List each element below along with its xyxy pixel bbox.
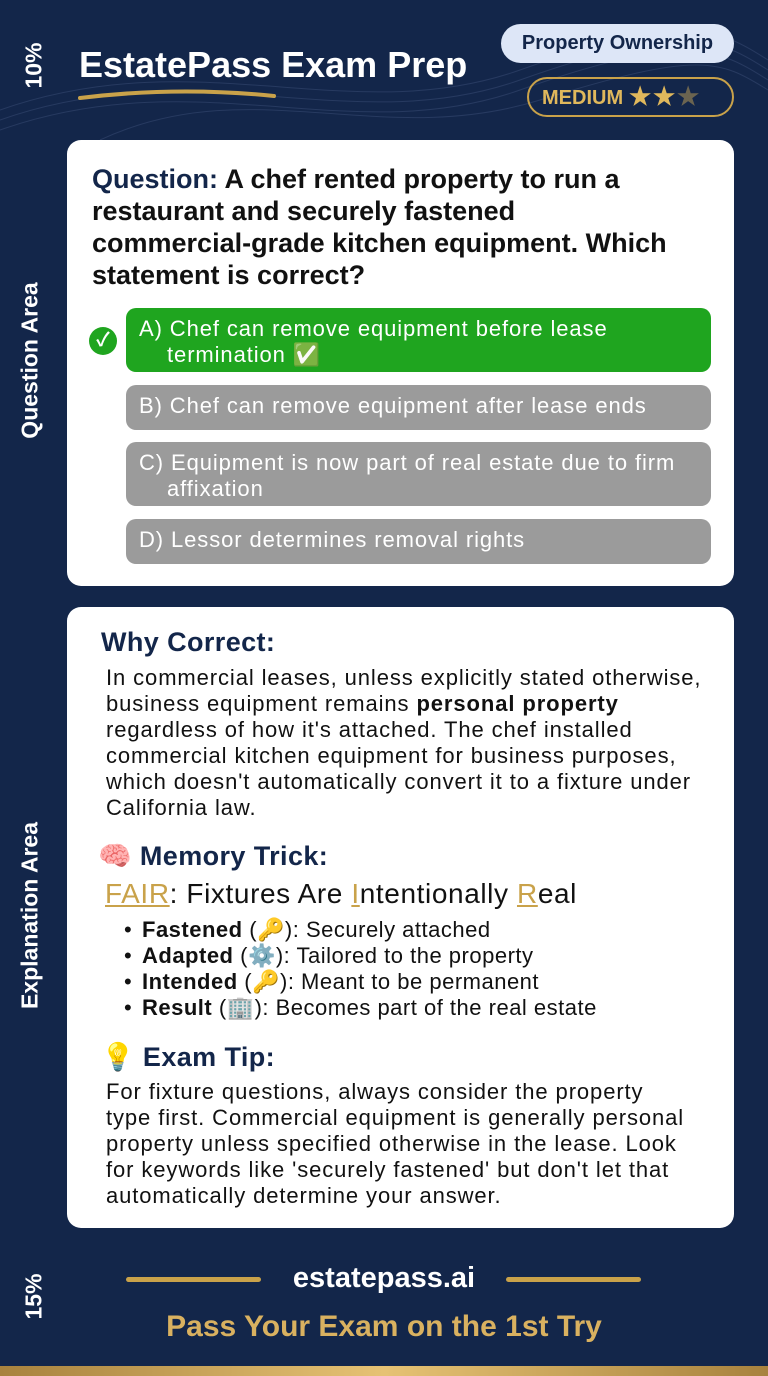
why correct text: commercial kitchen equipment for business purposes, (106, 743, 676, 768)
check icon: ✓ (96, 330, 110, 351)
question text: restaurant and securely fastened (92, 196, 515, 226)
badge: difficulty (527, 77, 734, 117)
option D: D) Lessor determines removal rights (139, 527, 525, 552)
option A correct: termination ✅ (167, 342, 321, 367)
exam tip text: type first. Commercial equipment is generally personal (106, 1105, 684, 1130)
why correct text: California law. (106, 795, 256, 820)
question text (92, 164, 667, 290)
exam tip text: automatically determine your answer. (106, 1183, 502, 1208)
title underline (78, 90, 276, 100)
mnemonic: FAIR: Fixtures Are Intentionally Real (105, 878, 577, 909)
option B (126, 385, 711, 430)
heading: why correct: Why Correct: (101, 627, 275, 657)
footer brand: estatepass.ai (293, 1262, 475, 1294)
title: EstatePass Exam Prep (79, 44, 467, 85)
gold bottom bar (0, 1366, 768, 1376)
why correct text: regardless of how it's attached. The chef installed (106, 717, 633, 742)
mnemonic list (124, 917, 597, 1020)
mnemonic list: Intended (🔑): Meant to be permanent (142, 969, 539, 994)
option C: affixation (167, 476, 264, 501)
panel: question (67, 140, 734, 586)
exam tip text (106, 1079, 684, 1208)
heading: memory trick: 🧠 Memory Trick: (98, 841, 328, 871)
option C (126, 442, 711, 506)
why correct text: In commercial leases, unless explicitly stated otherwise, (106, 665, 701, 690)
mnemonic list: Adapted (⚙️): Tailored to the property (142, 943, 534, 968)
badge: topic: Property Ownership (522, 32, 713, 54)
option B: B) Chef can remove equipment after lease ends (139, 393, 647, 418)
question text: statement is correct? (92, 260, 365, 290)
exam tip text: for keywords like 'securely fastened' but don't let that (106, 1157, 669, 1182)
why correct text: which doesn't automatically convert it to a fixture under (106, 769, 691, 794)
badge: difficulty: MEDIUM ★★★ (542, 83, 701, 109)
side label: Explanation Area: Explanation Area (16, 822, 42, 1009)
mnemonic list: Result (🏢): Becomes part of the real estate (142, 995, 597, 1020)
exam tip text: property unless specified otherwise in the lease. Look (106, 1131, 677, 1156)
question text: Question: A chef rented property to run a (92, 164, 620, 194)
side label: Question Area: Question Area (16, 282, 42, 439)
mnemonic list: Fastened (🔑): Securely attached (142, 917, 491, 942)
option D (126, 519, 711, 564)
side label: 10%: 10% (20, 42, 46, 89)
badge: topic (501, 24, 734, 63)
footer brand (126, 1262, 641, 1294)
tagline: Pass Your Exam on the 1st Try (166, 1310, 602, 1343)
heading: exam tip: 💡 Exam Tip: (101, 1042, 275, 1072)
check icon (89, 327, 117, 355)
side label: 15%: 15% (20, 1273, 46, 1320)
panel: explanation (67, 607, 734, 1228)
why correct text: business equipment remains personal property (106, 691, 619, 716)
why correct text (106, 665, 701, 820)
option A correct: A) Chef can remove equipment before lease (139, 316, 608, 341)
option C: C) Equipment is now part of real estate due to firm (139, 450, 675, 475)
question text: commercial-grade kitchen equipment. Which (92, 228, 667, 258)
option A correct (126, 308, 711, 372)
background waves (0, 40, 768, 140)
exam tip text: For fixture questions, always consider the property (106, 1079, 643, 1104)
